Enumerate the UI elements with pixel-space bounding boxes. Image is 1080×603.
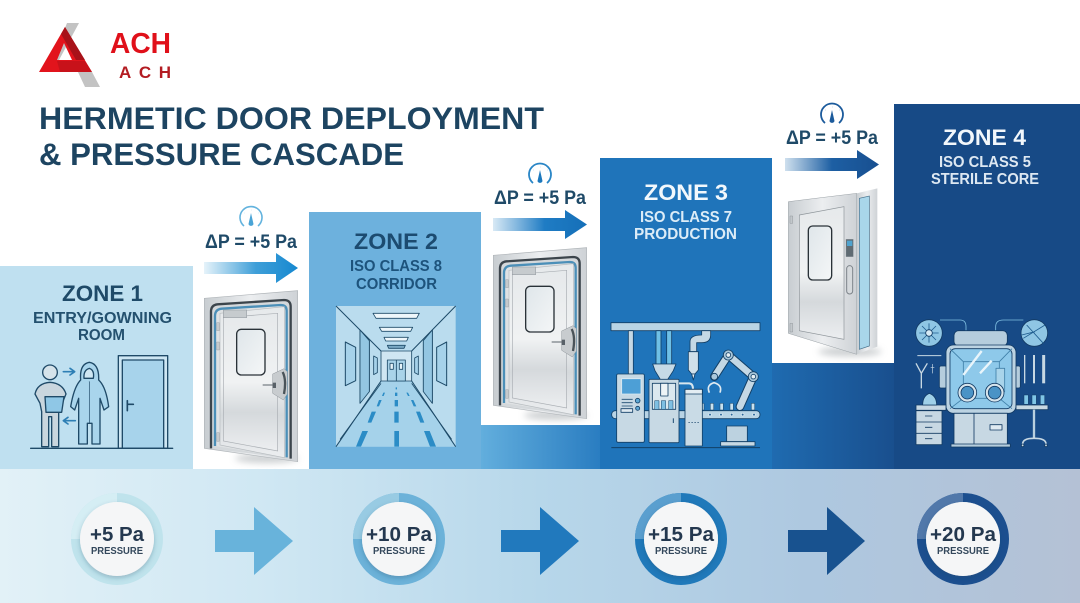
heading: zone 1: ZONE 1 <box>62 281 143 306</box>
logo sub wordmark: ACH <box>119 63 171 82</box>
title: HERMETIC DOOR DEPLOYMENT <box>39 100 544 136</box>
text: zone 3 description: PRODUCTION <box>634 226 737 243</box>
label: delta P 2: ΔP = +5 Pa <box>494 187 586 209</box>
arrow: 10 to 15 <box>501 507 579 575</box>
label: delta P 1: ΔP = +5 Pa <box>205 231 297 253</box>
text: zone 4 description <box>931 154 1039 188</box>
gauge: +20 Pa: +20 Pa <box>930 524 997 546</box>
gauge: +20 Pa <box>922 498 1004 580</box>
gauge: +10 Pa: PRESSURE <box>373 545 425 557</box>
text: zone 2 description: ISO CLASS 8 <box>350 258 442 275</box>
icon: logo mark <box>39 23 100 87</box>
text: zone 4 description: STERILE CORE <box>931 171 1039 188</box>
gauge icon 3 <box>821 104 843 123</box>
text: zone 3 description: ISO CLASS 7 <box>640 209 732 226</box>
gauge: +15 Pa: +15 Pa <box>648 524 715 546</box>
text: zone 3 description <box>634 209 737 243</box>
door 3 <box>788 188 882 356</box>
icon: production line <box>611 323 760 448</box>
gauge: +5 Pa: +5 Pa <box>90 524 145 546</box>
strip beneath doors <box>481 363 894 469</box>
door 1 <box>204 291 298 463</box>
arrow: delta P 3 <box>785 150 879 179</box>
text: zone 1 description <box>33 310 172 344</box>
gauge: +5 Pa: PRESSURE <box>91 545 143 557</box>
gauge: +20 Pa: PRESSURE <box>937 545 989 557</box>
heading: zone 2: ZONE 2 <box>354 229 438 254</box>
icon: sterile isolator <box>916 320 1048 447</box>
heading: zone 3: ZONE 3 <box>644 180 728 205</box>
text: zone 1 description: ENTRY/GOWNING <box>33 310 172 327</box>
door 2 <box>493 248 587 420</box>
text: zone 1 description: ROOM <box>78 327 125 344</box>
heading: zone 4: ZONE 4 <box>943 125 1026 150</box>
gauge: +5 Pa <box>76 498 158 580</box>
logo wordmark: ACH <box>110 28 171 60</box>
icon: corridor <box>336 306 456 447</box>
panel: zone 2 <box>309 212 481 469</box>
text: zone 4 description: ISO CLASS 5 <box>939 154 1031 171</box>
arrow: 15 to 20 <box>788 507 865 575</box>
text: zone 2 description <box>350 258 442 293</box>
panel: zone 4 <box>894 104 1080 469</box>
panel: zone 3 <box>600 158 772 469</box>
logo: ACH <box>39 23 171 87</box>
gauge: +15 Pa: PRESSURE <box>655 545 707 557</box>
pressure band <box>0 469 1080 603</box>
text: zone 2 description: CORRIDOR <box>356 276 437 293</box>
gauge icon 2 <box>529 164 551 183</box>
arrow: 5 to 10 <box>215 507 293 575</box>
label: delta P 3: ΔP = +5 Pa <box>786 127 878 149</box>
arrow: delta P 1 <box>204 253 298 283</box>
title: & PRESSURE CASCADE <box>39 136 404 172</box>
icon: gowning room <box>31 356 173 448</box>
arrow: delta P 2 <box>493 210 587 239</box>
gauge: +15 Pa <box>640 498 722 580</box>
panel: zone 1 <box>0 266 193 469</box>
gauge: +10 Pa: +10 Pa <box>366 524 433 546</box>
gauge icon 1 <box>240 207 262 226</box>
gauge: +10 Pa <box>357 498 440 580</box>
title <box>39 100 544 172</box>
